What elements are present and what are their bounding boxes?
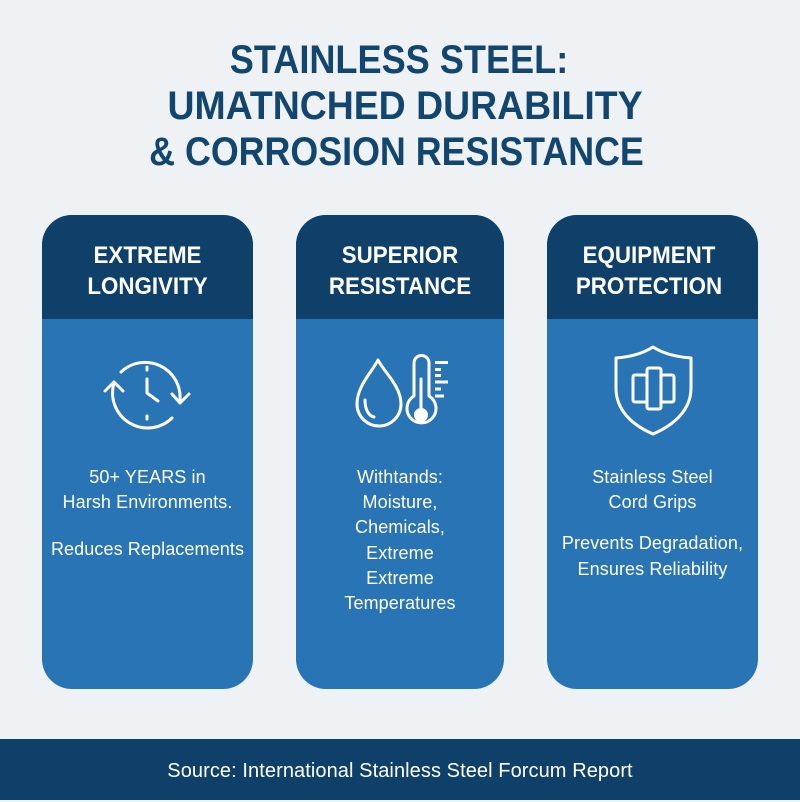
- title: UMATNCHED DURABILITY: [167, 84, 643, 128]
- text: protection details: Ensures Reliability: [578, 559, 727, 579]
- text: longivity details: [51, 467, 244, 559]
- text: resistance details: Moisture,: [363, 492, 437, 512]
- text: protection details: Prevents Degradation,: [562, 533, 743, 553]
- text: protection details: [562, 467, 743, 579]
- heading: extreme longivity: [42, 215, 253, 319]
- text: resistance details: [344, 467, 456, 613]
- text: resistance details: Temperatures: [344, 593, 456, 613]
- text: longivity details: Harsh Environments.: [63, 492, 232, 512]
- icon: clock with cycle arrows: [103, 360, 191, 430]
- text: resistance details: Withtands:: [357, 467, 443, 487]
- panel: equipment protection: [547, 215, 758, 689]
- heading: extreme longivity: LONGIVITY: [87, 273, 208, 300]
- text: protection details: Cord Grips: [608, 492, 697, 512]
- panel: superior resistance: [296, 215, 504, 689]
- heading: superior resistance: RESISTANCE: [329, 273, 471, 300]
- heading: equipment protection: EQUIPMENT: [583, 242, 715, 269]
- text: resistance details: Extreme: [366, 543, 434, 563]
- text: resistance details: Chemicals,: [355, 517, 445, 537]
- heading: superior resistance: [296, 215, 504, 319]
- panel: extreme longivity: [42, 215, 253, 689]
- icon: water drop and thermometer: [356, 354, 448, 428]
- text: resistance details: Extreme: [366, 568, 434, 588]
- heading: superior resistance: SUPERIOR: [342, 242, 458, 269]
- heading: equipment protection: [547, 215, 758, 319]
- heading: extreme longivity: EXTREME: [94, 242, 201, 269]
- text: longivity details: 50+ YEARS in: [89, 467, 206, 487]
- footer: source: [0, 739, 800, 800]
- text: protection details: Stainless Steel: [592, 467, 713, 487]
- heading: equipment protection: PROTECTION: [576, 273, 722, 300]
- footer: source: Source: International Stainless Steel Forcum Report: [167, 760, 633, 782]
- icon: shield with cord grip: [614, 346, 692, 436]
- title: & CORROSION RESISTANCE: [149, 130, 644, 174]
- title: STAINLESS STEEL:: [230, 38, 568, 82]
- title: [149, 38, 644, 174]
- text: longivity details: Reduces Replacements: [51, 539, 244, 559]
